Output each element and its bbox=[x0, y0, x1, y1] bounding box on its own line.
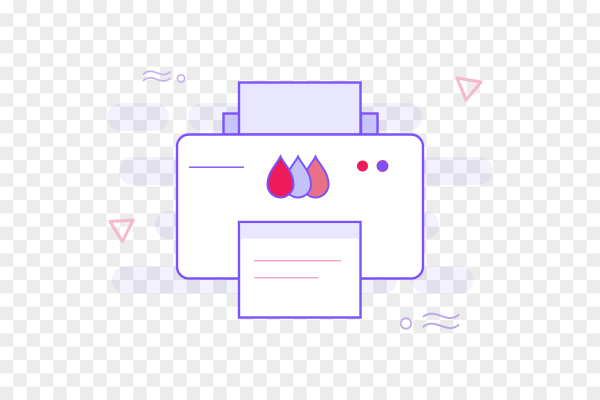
printer bbox=[177, 82, 423, 318]
icon: top-left waves bbox=[144, 71, 170, 81]
indicator dot: red bbox=[357, 160, 368, 172]
drop: lavender bbox=[285, 156, 311, 198]
paper line: long bbox=[254, 260, 341, 261]
ink drops bbox=[268, 156, 328, 198]
paper header band bbox=[240, 223, 359, 238]
printer body bbox=[177, 134, 423, 278]
paper line: short bbox=[254, 277, 318, 278]
paper tray right tab bbox=[361, 114, 378, 134]
body label line bbox=[189, 166, 244, 168]
indicator dot: purple bbox=[377, 160, 388, 172]
icon: bottom-right circle bbox=[401, 318, 411, 329]
drop: coral bbox=[302, 156, 328, 198]
background pills bbox=[107, 103, 493, 294]
icon: left triangle bbox=[110, 220, 133, 242]
output paper bbox=[239, 222, 360, 318]
paper tray left tab bbox=[224, 114, 240, 134]
icon: top-left circle bbox=[177, 75, 185, 82]
drop: crimson bbox=[268, 156, 294, 198]
input paper bbox=[239, 82, 360, 134]
icon: bottom-right waves bbox=[424, 314, 458, 328]
icon: top-right triangle bbox=[457, 78, 481, 100]
